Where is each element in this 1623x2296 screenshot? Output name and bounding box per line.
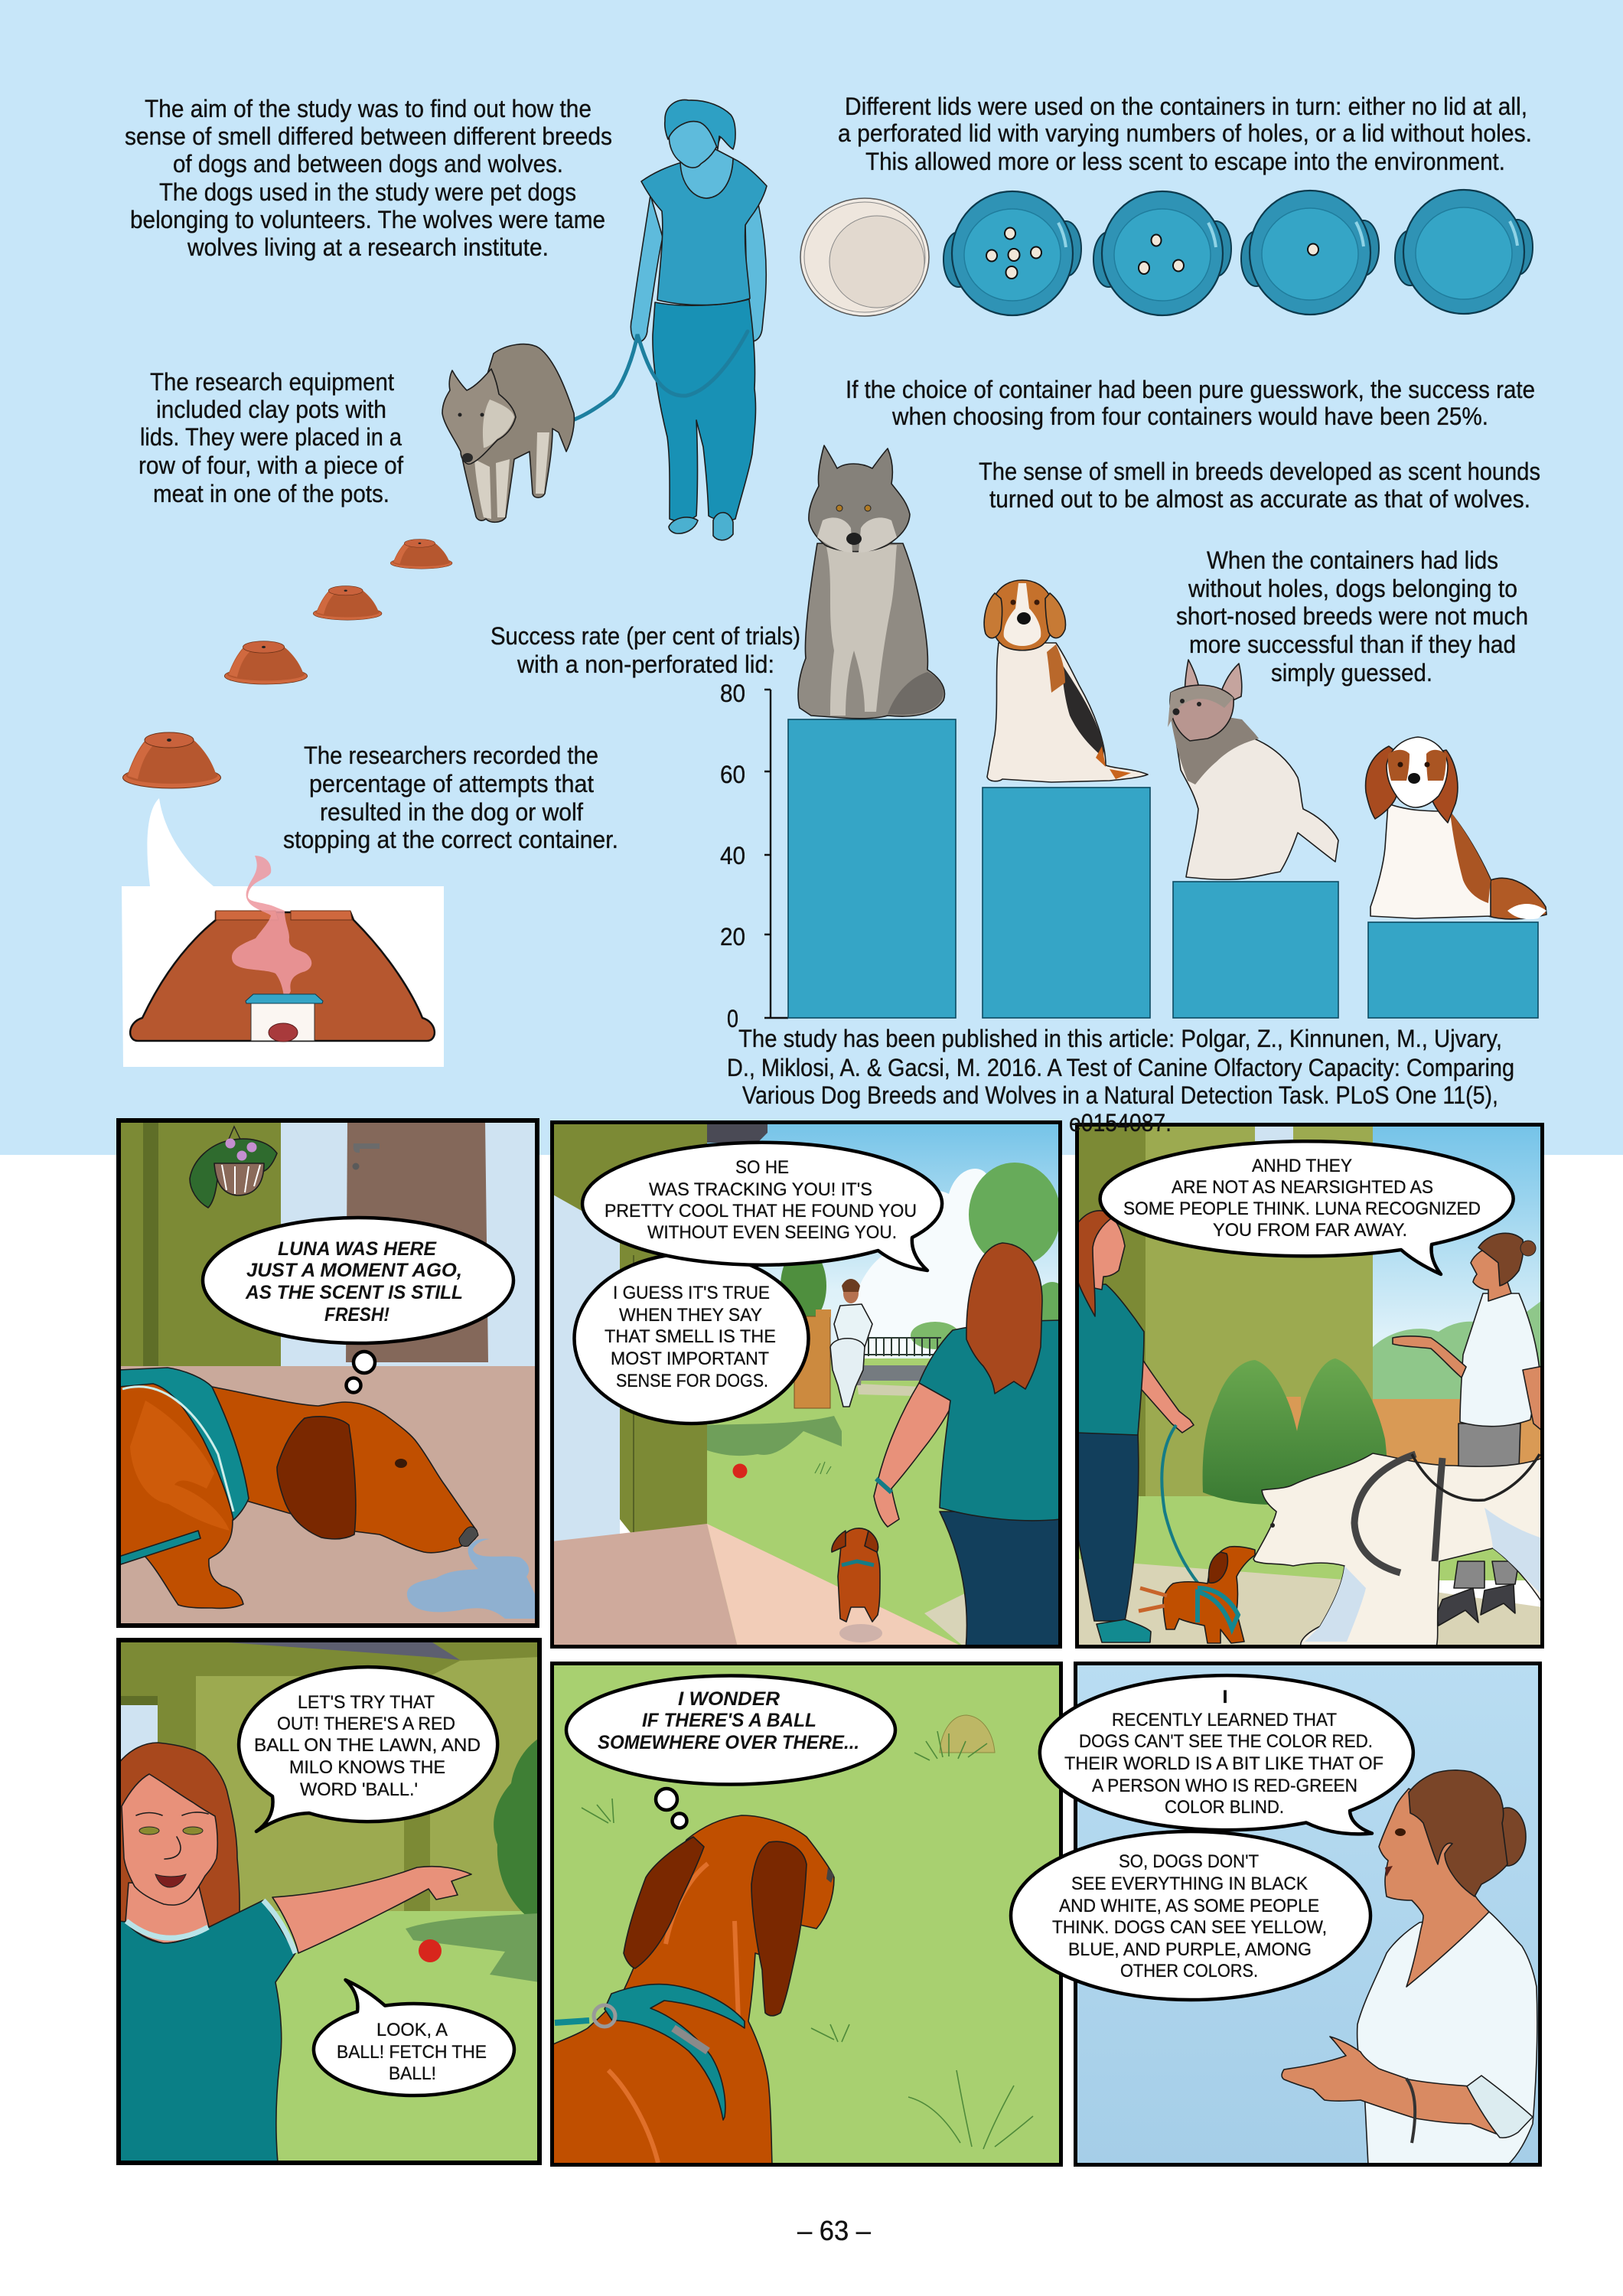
y axis labels: 60 <box>720 761 745 788</box>
page number: – 63 – <box>797 2215 871 2246</box>
beagle saddle <box>1062 664 1104 758</box>
speech bubble: dogs can't see red: COLOR BLIND. <box>1165 1797 1284 1818</box>
woman's arms <box>631 195 766 342</box>
gate post <box>794 1316 830 1408</box>
text: aim of the study: sense of smell differed between different breeds <box>125 122 612 150</box>
text: research equipment: row of four, with a piece of <box>139 452 403 479</box>
text: aim of the study: The aim of the study was to find out how the <box>145 95 592 122</box>
speech bubble: look, a ball <box>314 1980 514 2095</box>
text: aim of the study <box>125 95 612 261</box>
woman's arm and hand <box>1282 2037 1496 2134</box>
door frame wall <box>281 1155 535 1366</box>
woman's trousers <box>940 1512 1061 1649</box>
lawn <box>119 1911 539 2164</box>
woman's hair back <box>119 1743 240 1995</box>
white dog harness <box>1354 1454 1442 1573</box>
speech bubble: dogs can't see red <box>1040 1675 1413 1834</box>
speech bubble: dogs can see yellow: SO, DOGS DON'T <box>1119 1851 1259 1872</box>
bar: scent hounds <box>983 788 1150 1018</box>
pavement <box>1077 1559 1543 1647</box>
woman's shirt <box>1357 1912 1537 2165</box>
lawn <box>1077 1496 1543 1580</box>
text: citation, overlapping the panels: e0154087. <box>1069 1109 1172 1137</box>
bar: ancient breeds <box>1173 882 1338 1018</box>
scent plume <box>232 856 311 1003</box>
road <box>861 1365 926 1381</box>
chart heading: with a non-perforated lid: <box>517 651 774 678</box>
crested dog mane <box>1169 708 1259 784</box>
speech bubble: dogs can't see red: DOGS CAN'T SEE THE COLOR RED. <box>1079 1731 1373 1752</box>
sky background <box>1075 1663 1540 2165</box>
thought bubble <box>566 1676 895 1828</box>
speech bubble: dogs can't see red: A PERSON WHO IS RED-GREEN <box>1092 1776 1357 1796</box>
woman's shirt <box>119 1900 295 2163</box>
red ball <box>733 1463 747 1479</box>
fence <box>1293 1399 1543 1483</box>
icon: crested dog <box>1168 660 1338 879</box>
text: short-nosed breeds: without holes, dogs belonging to <box>1188 575 1517 602</box>
distant white dog <box>830 1339 865 1407</box>
y axis and ticks <box>764 690 788 1018</box>
y axis labels <box>720 680 745 1032</box>
woman's shoes <box>669 513 733 540</box>
white dog <box>1253 1453 1543 1647</box>
wolf face markings <box>817 517 897 553</box>
wolf tail shade <box>888 672 943 715</box>
text: short-nosed breeds: simply guessed. <box>1271 659 1432 687</box>
panel frame, drawn under the bubbles <box>1076 1664 1540 2164</box>
lawn <box>707 1358 964 1645</box>
text: different lids <box>838 93 1532 175</box>
sleeve trim <box>263 1900 295 1953</box>
woman's arm <box>874 1383 960 1527</box>
hound left ear <box>624 1837 704 1968</box>
text: citation, overlapping the panels: Various Dog Breeds and Wolves in a Natural Detection Task. PLoS One 11(5), <box>742 1081 1498 1109</box>
pot 4 <box>122 732 220 788</box>
woman's wrist band <box>876 1479 891 1492</box>
speech bubble: I guess it's true: THAT SMELL IS THE <box>605 1326 776 1347</box>
white dog shade <box>1305 1508 1543 1642</box>
dog shadow <box>839 1624 882 1642</box>
speech bubble: let's try that out: LET'S TRY THAT <box>298 1692 435 1713</box>
icon: sitting wolf <box>798 445 944 719</box>
wall <box>119 1640 539 1916</box>
hound body <box>552 1815 834 2165</box>
wolf cheek and nose <box>483 400 514 448</box>
callout white box and pointer <box>122 798 444 1067</box>
icon: clay pots in a row <box>122 540 452 788</box>
speech bubble: dogs can see yellow: THINK. DOGS CAN SEE YELLOW, <box>1052 1917 1327 1938</box>
grass tufts <box>582 1731 1033 2149</box>
open dish without lid <box>800 198 929 316</box>
thought bubble: SOMEWHERE OVER THERE... <box>598 1732 859 1753</box>
text: different lids: Different lids were used on the containers in turn: either no lid at all, <box>845 93 1527 120</box>
bushes <box>1203 1358 1387 1505</box>
roof soffit <box>707 1122 768 1143</box>
woman's shirt <box>919 1320 1061 1521</box>
speech bubble: let's try that out: MILO KNOWS THE <box>289 1757 445 1778</box>
speech bubble: and they are not as nearsighted: ARE NOT AS NEARSIGHTED AS <box>1172 1177 1433 1198</box>
spaniel ears <box>1366 746 1458 823</box>
lid with five holes <box>943 191 1081 315</box>
harness metal ring and leash <box>594 2005 615 2027</box>
speech bubble: look, a ball: BALL! FETCH THE <box>337 2042 487 2063</box>
dachshund <box>119 1368 478 1608</box>
speech bubble: dogs can see yellow: AND WHITE, AS SOME PEOPLE <box>1059 1896 1319 1916</box>
hanging basket with flowers <box>190 1127 277 1208</box>
bar: wolves <box>788 719 956 1018</box>
text: pure guesswork <box>846 376 1535 430</box>
text: aim of the study: belonging to volunteers. The wolves were tame <box>130 206 605 233</box>
woman's hair <box>1409 1770 1507 1896</box>
speech bubble: dogs can't see red: THEIR WORLD IS A BIT LIKE THAT OF <box>1064 1753 1383 1774</box>
speech bubble: let's try that out: OUT! THERE'S A RED <box>277 1714 455 1734</box>
dog leash <box>1412 1454 1540 1500</box>
woman's face <box>122 1774 217 1905</box>
speech bubble: dogs can see yellow: OTHER COLORS. <box>1120 1961 1258 1981</box>
icon: walking wolf <box>442 344 574 522</box>
bar chart <box>720 680 1538 1032</box>
page background: blue upper band <box>0 0 1623 1155</box>
text: aim of the study: of dogs and between dogs and wolves. <box>173 150 563 178</box>
speech bubble: dogs can see yellow <box>1011 1831 1370 2000</box>
small dachshund from behind <box>832 1528 880 1622</box>
speech bubble: I guess it's true: SENSE FOR DOGS. <box>616 1371 768 1391</box>
page background: white lower area <box>0 1155 1623 2296</box>
woman's face <box>669 107 721 168</box>
callout: cross-section of a pot <box>122 798 444 1067</box>
right woman's shirt <box>1460 1293 1540 1427</box>
footpath <box>707 1524 963 1647</box>
thought bubble: AS THE SCENT IS STILL <box>245 1282 463 1303</box>
crested dog head <box>1170 685 1234 741</box>
spaniel head <box>1387 737 1448 807</box>
bush <box>494 1739 539 1917</box>
woman's shirt <box>641 158 767 305</box>
spaniel tail <box>1488 878 1546 919</box>
comic panel 1: dachshund sniffing <box>119 1120 537 1626</box>
speech bubble: let's try that out: WORD 'BALL.' <box>300 1779 418 1800</box>
comic panel 3: the dogs meet <box>1077 1124 1543 1647</box>
thought bubble <box>203 1218 513 1393</box>
speech bubble: and they are not as nearsighted: YOU FROM FAR AWAY. <box>1213 1220 1407 1241</box>
speech bubble: and they are not as nearsighted: SOME PEOPLE THINK. LUNA RECOGNIZED <box>1123 1199 1481 1219</box>
scent trail <box>407 1539 536 1619</box>
speech bubble: dogs can't see red: I <box>1221 1687 1229 1707</box>
y axis labels: 0 <box>727 1005 738 1032</box>
text: short-nosed breeds: more successful than if they had <box>1189 631 1516 658</box>
dachshund light highlight <box>130 1401 230 1531</box>
icon: woman walking, blue figure <box>631 99 767 540</box>
text: research equipment: meat in one of the pots. <box>153 480 389 507</box>
dachshund ear <box>277 1417 356 1539</box>
hound harness <box>605 1985 745 2120</box>
sky <box>707 1124 1058 1358</box>
text: research equipment <box>139 368 403 507</box>
wolf legs light <box>474 432 549 519</box>
shadow on lawn <box>707 1416 842 1456</box>
distant fence <box>865 1338 941 1356</box>
speech bubble: so he was tracking you: PRETTY COOL THAT HE FOUND YOU <box>605 1201 917 1221</box>
chart heading: Success rate (per cent of trials) <box>490 622 800 650</box>
text: short-nosed breeds <box>1176 546 1528 687</box>
bar: short-nosed breeds <box>1368 922 1538 1018</box>
right woman's head <box>1471 1233 1536 1301</box>
woman's hair <box>966 1243 1042 1394</box>
speech bubble: so he was tracking you <box>582 1143 942 1270</box>
speech bubble: let's try that out <box>239 1667 497 1831</box>
hound highlights <box>608 1864 738 2163</box>
door handle <box>354 1143 380 1153</box>
comic panel 2: woman and dog seen from behind <box>552 1122 1075 1649</box>
text: scent hounds: The sense of smell in breeds developed as scent hounds <box>979 458 1540 485</box>
text: research equipment: The research equipment <box>150 368 394 396</box>
text: research equipment: included clay pots with <box>156 396 386 423</box>
crested dog ears <box>1185 660 1242 708</box>
text: short-nosed breeds: When the containers had lids <box>1207 546 1498 574</box>
piece of meat <box>269 1023 298 1042</box>
lawn background <box>552 1663 1061 2165</box>
text: pure guesswork: when choosing from four containers would have been 25%. <box>891 403 1488 430</box>
left woman <box>1077 1211 1194 1642</box>
text: scent hounds <box>979 458 1540 513</box>
speech bubble: let's try that out: BALL ON THE LAWN, AND <box>254 1735 481 1756</box>
y axis labels: 20 <box>720 923 745 951</box>
woman's hair bun <box>1489 1808 1526 1866</box>
wolf head <box>442 369 516 464</box>
speech bubble: dogs can see yellow: BLUE, AND PURPLE, AMONG <box>1068 1939 1312 1960</box>
window <box>120 1704 158 1760</box>
pot 1 <box>390 540 452 569</box>
beagle ears <box>984 593 1065 638</box>
sky <box>1077 1124 1543 1507</box>
chart heading <box>490 622 800 678</box>
speech bubble: so he was tracking you: WITHOUT EVEN SEEING YOU. <box>647 1222 897 1243</box>
speech bubble: look, a ball: LOOK, A <box>376 2020 448 2040</box>
woman's hair <box>665 99 735 149</box>
dachshund nose <box>459 1527 478 1547</box>
speech bubble: I guess it's true: I GUESS IT'S TRUE <box>613 1283 770 1303</box>
speech bubble: and they are not as nearsighted <box>1100 1141 1514 1274</box>
woman's eye and mouth <box>1385 1828 1406 1877</box>
beagle muzzle blaze <box>1004 583 1041 646</box>
pillar and roof <box>552 1122 707 1538</box>
dark upper band and pillars <box>119 1640 196 1916</box>
light blue wall <box>552 1193 620 1542</box>
green wall <box>119 1120 281 1366</box>
trees <box>969 1163 1061 1267</box>
speech bubble: and they are not as nearsighted: ANHD THEY <box>1252 1156 1352 1176</box>
wall <box>1146 1124 1373 1499</box>
lawn shadow <box>406 1913 539 1982</box>
woman's bracelet <box>1406 2079 1415 2143</box>
text: researchers recorded: stopping at the correct container. <box>283 826 618 853</box>
speech bubble: dogs can't see red: RECENTLY LEARNED THAT <box>1112 1710 1337 1730</box>
icon: beagle <box>984 580 1148 782</box>
thought bubble: JUST A MOMENT AGO, <box>246 1260 462 1281</box>
text: aim of the study: The dogs used in the study were pet dogs <box>159 178 576 206</box>
small dachshund <box>1139 1547 1255 1643</box>
speech bubble: so he was tracking you: WAS TRACKING YOU! IT'S <box>649 1179 872 1200</box>
spaniel brown patch <box>1450 811 1491 903</box>
right woman's arm and hand <box>1393 1336 1466 1378</box>
rolled sleeve <box>1467 2076 1533 2138</box>
yellow ball in grass <box>940 1715 995 1753</box>
text: aim of the study: wolves living at a research institute. <box>187 233 549 261</box>
pot 3 <box>224 641 308 684</box>
fence behind bushes <box>1286 1397 1301 1443</box>
woman's neck and face <box>1379 1789 1489 1987</box>
text: researchers recorded: resulted in the dog or wolf <box>320 798 583 826</box>
pot 2 <box>313 586 382 620</box>
text: researchers recorded: The researchers recorded the <box>304 742 598 769</box>
far trees <box>1373 1301 1541 1408</box>
crested dog body <box>1175 731 1338 879</box>
wolf chest and legs <box>826 545 897 716</box>
roof <box>207 1641 460 1660</box>
container lid <box>246 994 323 1003</box>
text: researchers recorded: percentage of attempts that <box>309 770 594 797</box>
y axis labels: 80 <box>720 680 745 707</box>
icon: leash <box>520 331 748 425</box>
clouds <box>852 1169 986 1358</box>
small container <box>251 1003 314 1041</box>
right woman's legs and shoes <box>1436 1424 1520 1626</box>
icon: lids row <box>800 190 1533 316</box>
wolf body <box>462 344 574 522</box>
woman's neck and chest <box>680 149 733 198</box>
comic panel 4: woman pointing at the ball <box>119 1640 539 2164</box>
text: research equipment: lids. They were placed in a <box>140 423 402 451</box>
leash from woman to small dog <box>1162 1425 1198 1583</box>
ground left <box>552 1524 738 1647</box>
speech bubble: look, a ball: BALL! <box>389 2063 436 2084</box>
wolf body and tail <box>798 543 944 719</box>
text: different lids: a perforated lid with varying numbers of holes, or a lid without holes. <box>838 119 1532 147</box>
lid with one hole <box>1241 191 1379 315</box>
woman's neck <box>125 1883 209 1943</box>
speech bubble: dogs can see yellow: SEE EVERYTHING IN BLACK <box>1071 1874 1308 1894</box>
speech bubble: I guess it's true: WHEN THEY SAY <box>619 1305 762 1326</box>
icon: spaniel <box>1366 737 1546 919</box>
brown door <box>346 1120 488 1362</box>
woman's arm <box>272 1867 471 1953</box>
text: short-nosed breeds: short-nosed breeds were not much <box>1176 602 1528 630</box>
text: citation, overlapping the panels <box>727 1025 1514 1137</box>
comic panel 6: woman explains dogs' colour vision <box>1011 1663 1540 2165</box>
text: researchers recorded <box>283 742 618 853</box>
woman's eyes nose mouth <box>136 1812 208 1887</box>
text: citation, overlapping the panels: D., Miklosi, A. & Gacsi, M. 2016. A Test of Canine Olfactory Capacity: Comparing <box>727 1054 1514 1081</box>
pot rim <box>216 911 352 920</box>
lid without holes <box>1395 190 1533 314</box>
thought bubble: I WONDER <box>678 1688 780 1710</box>
spaniel body <box>1370 804 1491 918</box>
red ball <box>419 1939 442 1962</box>
grass tufts <box>815 1462 831 1474</box>
thought bubble: LUNA WAS HERE <box>278 1238 437 1260</box>
dachshund harness <box>119 1368 249 1520</box>
pot cross-section <box>130 912 435 1041</box>
lid with three holes <box>1093 191 1231 315</box>
hound nose <box>826 1867 834 1883</box>
text: citation, overlapping the panels: The study has been published in this article: Polgar, Z., Kinnunen, M., Ujvary, <box>738 1025 1502 1052</box>
text: different lids: This allowed more or less scent to escape into the environment. <box>865 148 1505 175</box>
y axis labels: 40 <box>720 842 745 869</box>
beagle head <box>990 580 1054 651</box>
speech bubble: so he was tracking you: SO HE <box>735 1157 789 1178</box>
text: scent hounds: turned out to be almost as accurate as that of wolves. <box>989 485 1530 513</box>
text: pure guesswork: If the choice of container had been pure guesswork, the success rate <box>846 376 1535 403</box>
dachshund eye <box>395 1459 407 1468</box>
thought bubble: FRESH! <box>324 1304 389 1326</box>
beagle body <box>987 643 1148 782</box>
speech bubble: I guess it's true: MOST IMPORTANT <box>611 1349 769 1369</box>
floor <box>119 1366 537 1626</box>
comic panel 5: dog looking at the lawn <box>552 1663 1061 2165</box>
wolf head <box>809 445 910 552</box>
distant woman <box>834 1279 872 1385</box>
speech bubble: I guess it's true <box>574 1254 808 1424</box>
hound right ear <box>751 1841 807 2016</box>
thought bubble: IF THERE'S A BALL <box>642 1710 816 1731</box>
woman's trousers <box>653 299 756 521</box>
